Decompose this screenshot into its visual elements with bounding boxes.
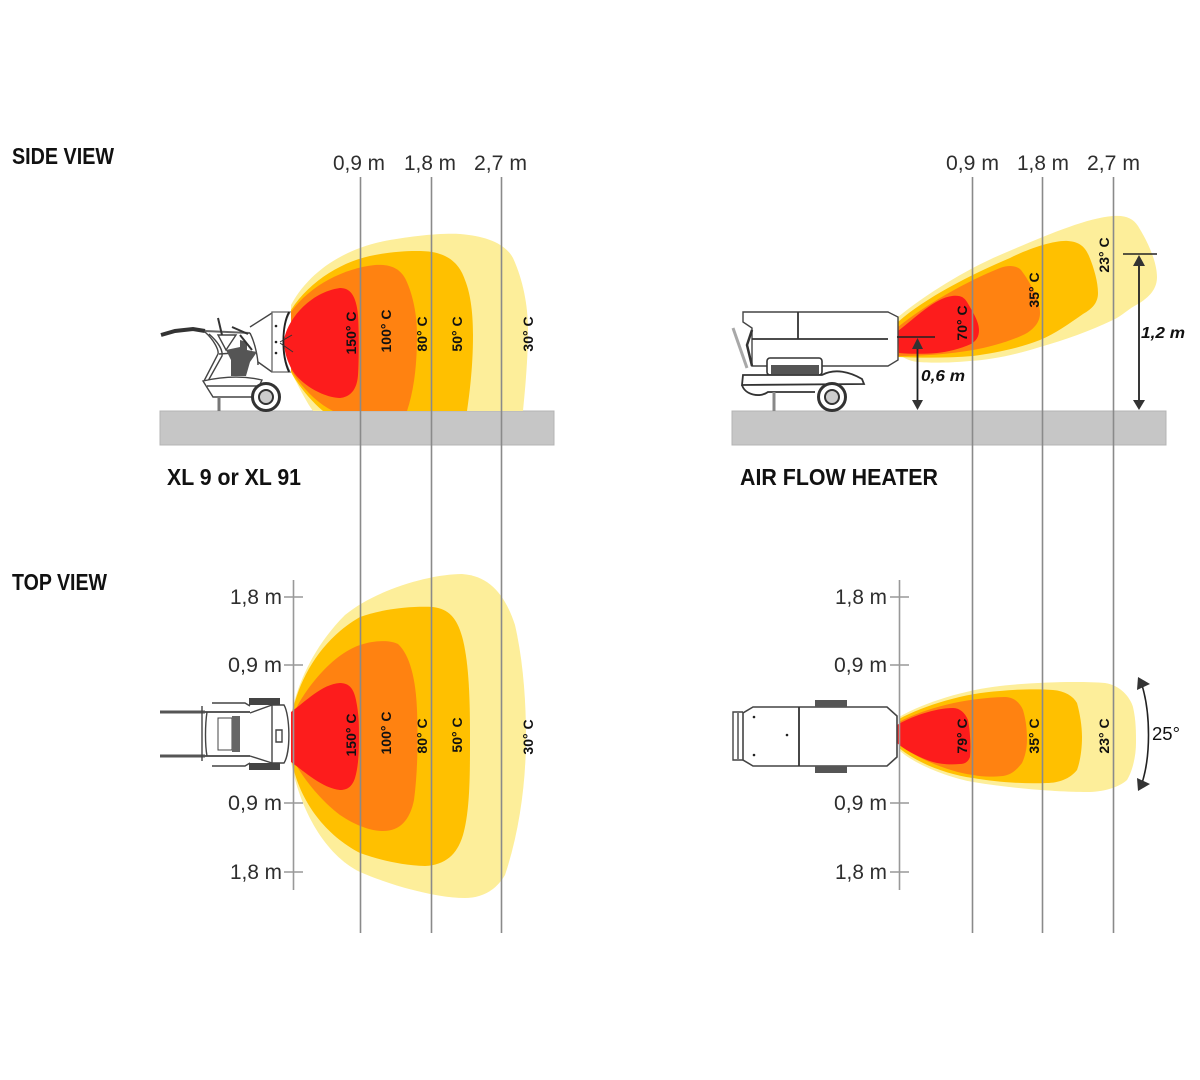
- temperature labels: XL side view: 100° C: [378, 310, 394, 352]
- lateral axis: XL top view: 1,8 m: [230, 586, 282, 609]
- distance labels: air flow: [946, 152, 1140, 175]
- temperature labels: XL side view: 30° C: [520, 316, 536, 352]
- lateral axis: XL top view: 0,9 m: [228, 792, 282, 815]
- heading: air flow heater: AIR FLOW HEATER: [740, 464, 938, 490]
- lateral axis: air flow top view: 0,9 m: [834, 792, 887, 815]
- temperature labels: air flow side view: [954, 237, 1112, 341]
- height arrow: 1,2 m: [1123, 254, 1185, 410]
- temperature labels: air flow top view: 35° C: [1026, 718, 1042, 754]
- heading: XL 9 or XL 91: XL 9 or XL 91: [167, 464, 301, 490]
- temperature labels: XL top view: 50° C: [449, 717, 465, 753]
- distance line: XL 1,8 m: [430, 177, 432, 933]
- distance line: air flow 0,9 m: [972, 177, 974, 933]
- temperature labels: XL top view: 150° C: [343, 714, 359, 756]
- height arrow: 1,2 m: 1,2 m: [1141, 325, 1185, 342]
- temperature labels: air flow side view: 70° C: [954, 305, 970, 341]
- temperature labels: air flow top view: [954, 718, 1112, 754]
- distance labels: XL: 2,7 m: [474, 152, 527, 175]
- lateral axis: air flow top view: 0,9 m: [834, 654, 887, 677]
- heater illustration: air flow side view: [733, 312, 898, 411]
- temperature labels: XL top view: [343, 712, 536, 756]
- heater illustration: XL top view: [160, 698, 289, 770]
- heat zones: air flow side view: [898, 216, 1157, 363]
- temperature labels: XL side view: [343, 310, 536, 354]
- heat zones: air flow top view: [897, 682, 1136, 792]
- ground: XL side view: [160, 411, 554, 445]
- temperature labels: XL side view: 50° C: [449, 316, 465, 352]
- distance labels: XL: 1,8 m: [404, 152, 456, 175]
- ground: air flow side view: [732, 411, 1166, 445]
- spread angle arrow: 25 degrees: [1137, 677, 1180, 791]
- spread angle arrow: 25 degrees: 25°: [1152, 724, 1180, 744]
- distance labels: air flow: 0,9 m: [946, 152, 999, 175]
- temperature labels: XL top view: 100° C: [378, 712, 394, 754]
- heater illustration: XL side view: [161, 312, 293, 411]
- distance labels: XL: [333, 152, 527, 175]
- height arrow: 0,6 m: [897, 337, 965, 410]
- heat zones: XL side view: [284, 234, 528, 411]
- distance line: XL 2,7 m: [500, 177, 502, 933]
- distance line: air flow 1,8 m: [1042, 177, 1044, 933]
- temperature labels: XL top view: 80° C: [414, 718, 430, 754]
- distance labels: air flow: 1,8 m: [1017, 152, 1069, 175]
- distance labels: XL: 0,9 m: [333, 152, 385, 175]
- heading: side view: SIDE VIEW: [12, 143, 114, 169]
- temperature labels: air flow top view: 23° C: [1096, 718, 1112, 754]
- temperature labels: air flow side view: 35° C: [1026, 272, 1042, 308]
- height arrow: 0,6 m: 0,6 m: [921, 368, 965, 385]
- temperature labels: XL side view: 150° C: [343, 312, 359, 354]
- heading: top view: TOP VIEW: [12, 569, 107, 595]
- lateral axis: air flow top view: 1,8 m: [835, 861, 887, 884]
- lateral axis: air flow top view: 1,8 m: [835, 586, 887, 609]
- distance labels: air flow: 2,7 m: [1087, 152, 1140, 175]
- heat zones: XL top view: [291, 574, 526, 898]
- temperature labels: XL side view: 80° C: [414, 316, 430, 352]
- distance line: air flow 2,7 m: [1112, 177, 1114, 933]
- lateral axis: XL top view: 0,9 m: [228, 654, 282, 677]
- lateral axis: air flow top view: [834, 580, 909, 890]
- lateral axis: XL top view: 1,8 m: [230, 861, 282, 884]
- distance line: XL 0,9 m: [360, 177, 362, 933]
- lateral axis: XL top view: [228, 580, 303, 890]
- temperature labels: XL top view: 30° C: [520, 719, 536, 755]
- temperature labels: air flow side view: 23° C: [1096, 237, 1112, 273]
- heater illustration: air flow top view: [733, 700, 897, 773]
- temperature labels: air flow top view: 79° C: [954, 718, 970, 754]
